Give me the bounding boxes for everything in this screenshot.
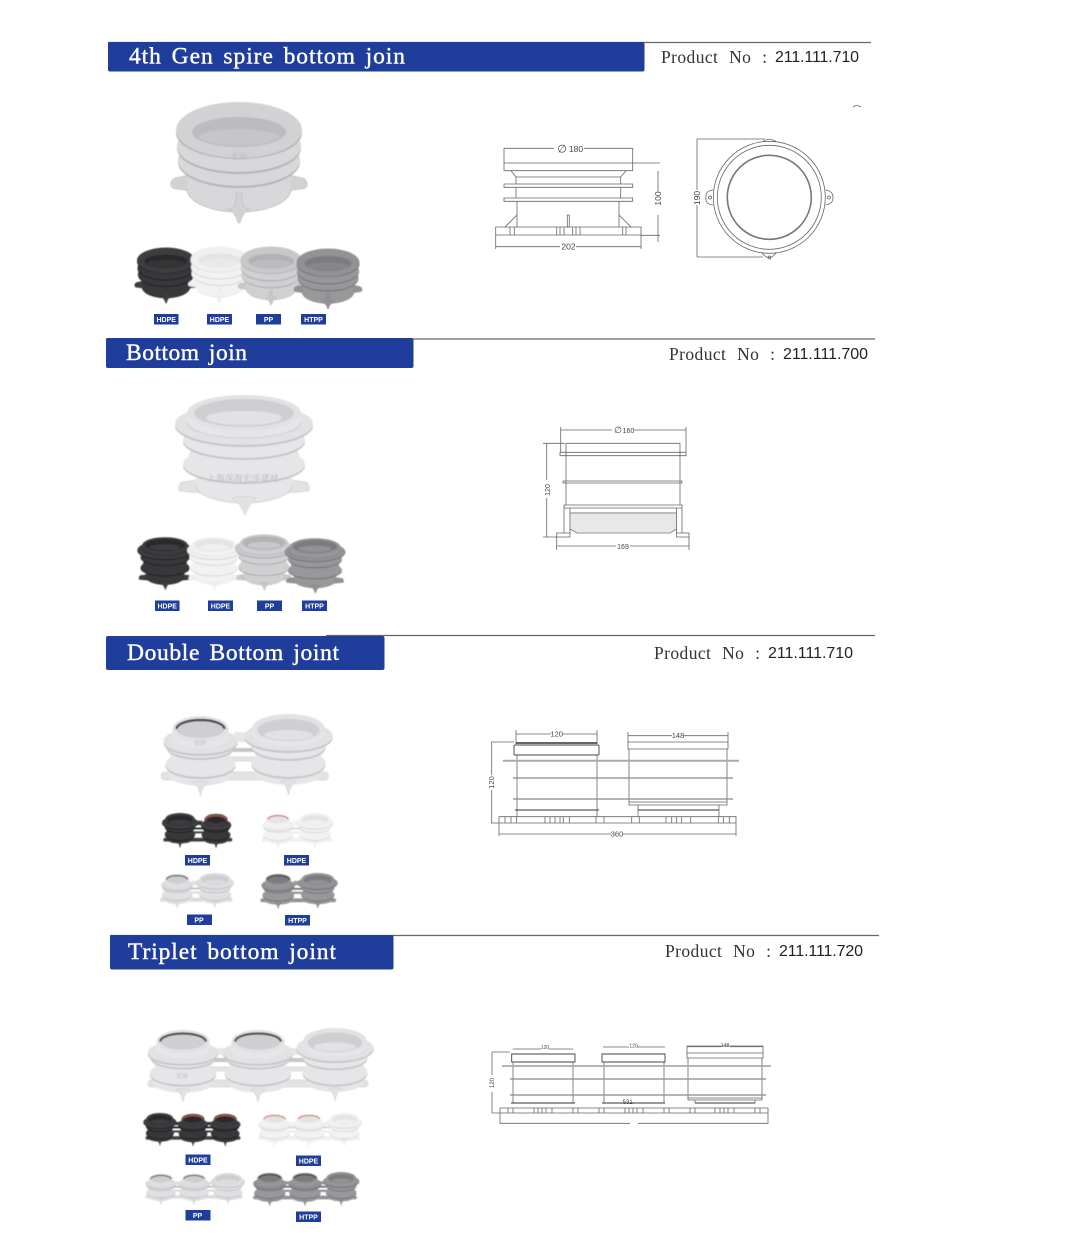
material badges row 3 (185, 855, 310, 926)
heading bar (106, 636, 384, 670)
dimension labels: 148 (721, 1043, 729, 1049)
heading bar (108, 42, 644, 72)
colour variants: double bottom joint (160, 813, 338, 909)
material badges row 1 (154, 314, 326, 324)
product render: double bottom joint: 宏添 (194, 739, 207, 747)
material badges row 1: HTPP (304, 317, 323, 324)
product render: bottom join (175, 395, 313, 515)
product render: triplet bottom joint (148, 1028, 374, 1102)
product number (661, 47, 859, 67)
material badges row 1: PP (264, 317, 273, 324)
heading text: Double Bottom joint (127, 640, 339, 666)
dimension labels (487, 730, 684, 838)
dimension labels (490, 1043, 729, 1106)
dimension labels: 120 (541, 1045, 549, 1051)
heading bar (106, 338, 414, 368)
colour variants: bottom join (137, 534, 345, 594)
material badges row 3: HDPE (287, 858, 307, 865)
colour variants: triplet bottom joint (143, 1113, 362, 1206)
dimension labels: ∅ (614, 425, 622, 435)
material badges row 2: HDPE (157, 604, 177, 610)
dimension labels: 202 (561, 242, 576, 252)
technical drawing: side view spire bottom join (496, 144, 663, 252)
product number (654, 643, 853, 663)
heading bar (110, 935, 394, 970)
material badges row 4 (186, 1154, 321, 1222)
section header: Bottom join (106, 338, 875, 368)
dimension labels: 360 (611, 830, 623, 838)
product number (665, 941, 863, 961)
technical drawing: triplet bottom joint (490, 1043, 771, 1123)
dimension labels: 120 (629, 1044, 638, 1050)
product number: 211.111.700 (783, 346, 868, 363)
product render: triplet bottom joint: 宏添 (176, 1072, 189, 1080)
dimension labels: 148 (672, 731, 684, 740)
product render: bottom join: 上海深海宏添建材 (207, 473, 279, 483)
dimension labels: 180 (569, 144, 583, 154)
product number: Product No : (665, 941, 771, 961)
material badges row 4: HTPP (299, 1214, 318, 1222)
material badges row 4: PP (193, 1213, 202, 1220)
dimension label: 190 (692, 191, 702, 205)
material badges row 3: PP (194, 918, 204, 924)
colour variants: spire bottom join (135, 246, 362, 309)
material badges row 1: HDPE (210, 317, 230, 324)
dimension labels (557, 144, 663, 252)
section header: Triplet bottom joint (110, 935, 879, 970)
product number: 211.111.720 (779, 943, 863, 960)
dimension labels: 169 (617, 544, 629, 551)
product number: Product No : (661, 47, 767, 67)
product render: spire bottom join: 宏添 (231, 151, 248, 161)
product number: 211.111.710 (768, 645, 853, 662)
material badges row 1: HDPE (156, 317, 176, 324)
material badges row 4: HDPE (188, 1158, 208, 1164)
section header: Double Bottom joint (106, 636, 875, 670)
technical drawing: top view spire bottom join (692, 106, 861, 259)
material badges row 2 (155, 600, 327, 611)
heading text: 4th Gen spire bottom join (129, 44, 405, 70)
product number: Product No : (669, 344, 775, 364)
dimension labels: 160 (623, 428, 634, 435)
material badges row 2: PP (265, 604, 274, 610)
dimension labels: 120 (550, 730, 563, 738)
product number (669, 344, 868, 364)
product render: spire bottom join (171, 102, 307, 223)
dimension labels: 120 (487, 776, 496, 789)
material badges row 4: HDPE (299, 1158, 319, 1166)
dimension labels: 120 (545, 484, 552, 496)
dimension labels: ∅ (557, 144, 567, 156)
technical drawing: bottom join (543, 425, 689, 551)
product render: double bottom joint (162, 714, 332, 796)
technical drawing: double bottom joint (487, 730, 739, 838)
section header: 4th Gen spire bottom join (108, 42, 871, 72)
dimension labels: 100 (653, 191, 663, 206)
dimension labels: 120 (490, 1077, 496, 1088)
heading text: Bottom join (126, 340, 247, 366)
material badges row 2: HTPP (305, 604, 324, 610)
product number: 211.111.710 (775, 49, 859, 66)
material badges row 2: HDPE (211, 604, 231, 610)
dimension labels: 531 (623, 1100, 633, 1106)
material badges row 3: HTPP (288, 918, 307, 925)
material badges row 3: HDPE (188, 858, 208, 865)
heading text: Triplet bottom joint (128, 939, 336, 965)
product number: Product No : (654, 643, 760, 663)
dimension labels (545, 425, 634, 551)
